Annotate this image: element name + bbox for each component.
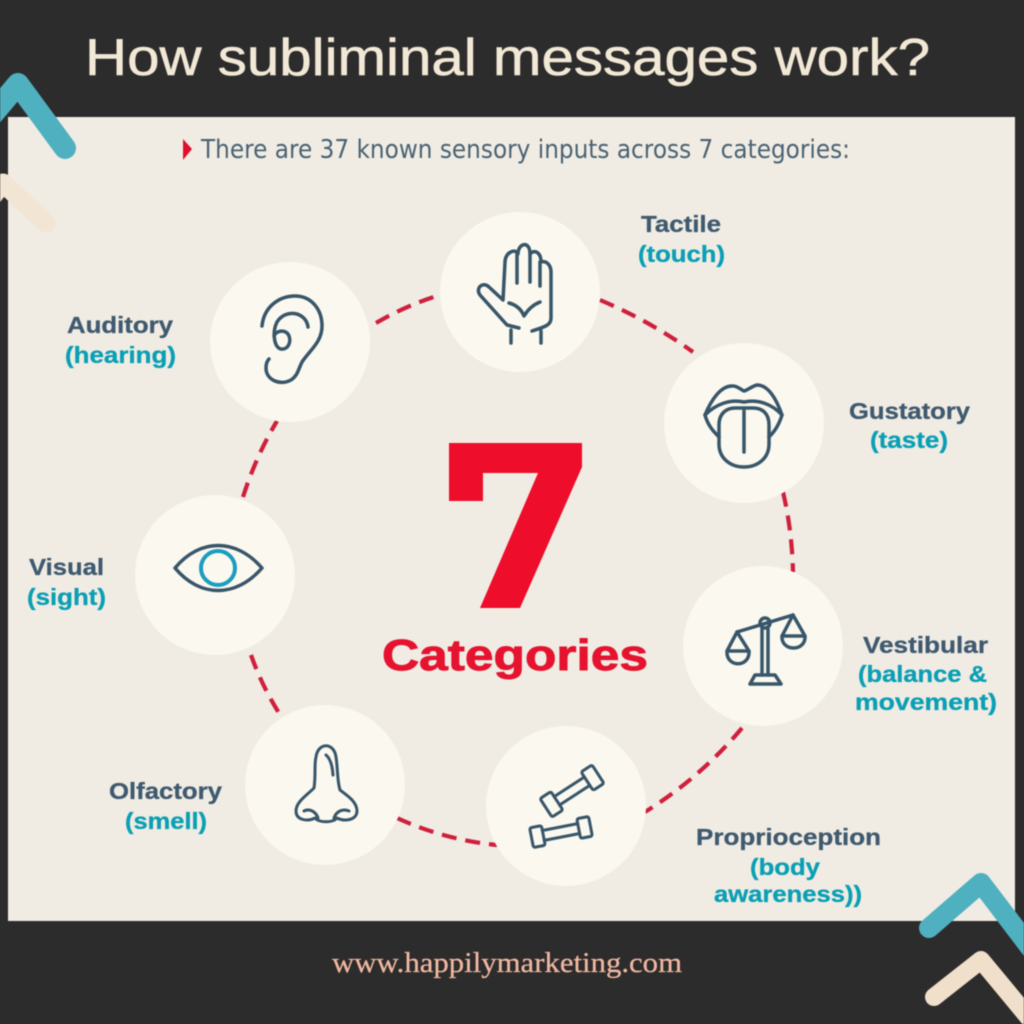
category: visual [135, 495, 295, 655]
label: auditory: (hearing) [65, 342, 176, 368]
category: olfactory [245, 705, 405, 865]
icon: bottom-right beige chevron [934, 960, 1024, 1024]
icon: ear [262, 296, 322, 382]
icon: eye [175, 546, 262, 590]
category: gustatory [664, 343, 824, 503]
label: gustatory [849, 398, 970, 453]
label: tactile [638, 211, 725, 267]
icon: hand [478, 245, 551, 343]
label: gustatory: Gustatory [849, 398, 970, 424]
icon: tongue [705, 385, 782, 467]
dashed ring connecting the categories [243, 296, 793, 845]
label: vestibular: movement) [855, 689, 997, 715]
label: visual [27, 554, 106, 610]
icon: nose [296, 746, 357, 822]
category: vestibular [683, 566, 843, 726]
label: olfactory: (smell) [125, 808, 207, 834]
categories label: Categories [382, 631, 648, 680]
title: How subliminal messages work? [85, 29, 930, 87]
category: tactile [440, 212, 600, 372]
category: proprioception [486, 726, 646, 886]
label: olfactory: Olfactory [109, 778, 222, 804]
label: proprioception [696, 824, 881, 907]
label: proprioception: Proprioception [696, 824, 881, 850]
label: gustatory: (taste) [870, 427, 948, 453]
icon: top-left beige chevron [0, 183, 46, 223]
icon: bottom-right teal chevron [929, 883, 1024, 950]
big number 7 [449, 443, 582, 608]
icon: dumbbells [530, 765, 604, 848]
label: tactile: Tactile [641, 211, 721, 237]
label: proprioception: awareness)) [714, 881, 862, 907]
label: auditory [65, 312, 176, 368]
footer url: www.happilymarketing.com [332, 948, 682, 979]
icon: top-left teal chevron [0, 84, 65, 148]
category: auditory [210, 262, 370, 422]
label: vestibular: (balance & [858, 661, 987, 687]
label: tactile: (touch) [638, 241, 725, 267]
label: auditory: Auditory [67, 312, 173, 338]
label: visual: Visual [29, 554, 104, 580]
icon: balance scales [727, 615, 805, 684]
panel: main background [8, 117, 1015, 921]
subtitle with arrow: There are 37 known sensory inputs across 7 categories: [200, 135, 850, 165]
label: olfactory [109, 778, 222, 834]
label: proprioception: (body [750, 854, 820, 880]
label: vestibular: Vestibular [863, 632, 988, 658]
label: visual: (sight) [27, 584, 106, 610]
label: vestibular [855, 632, 997, 715]
